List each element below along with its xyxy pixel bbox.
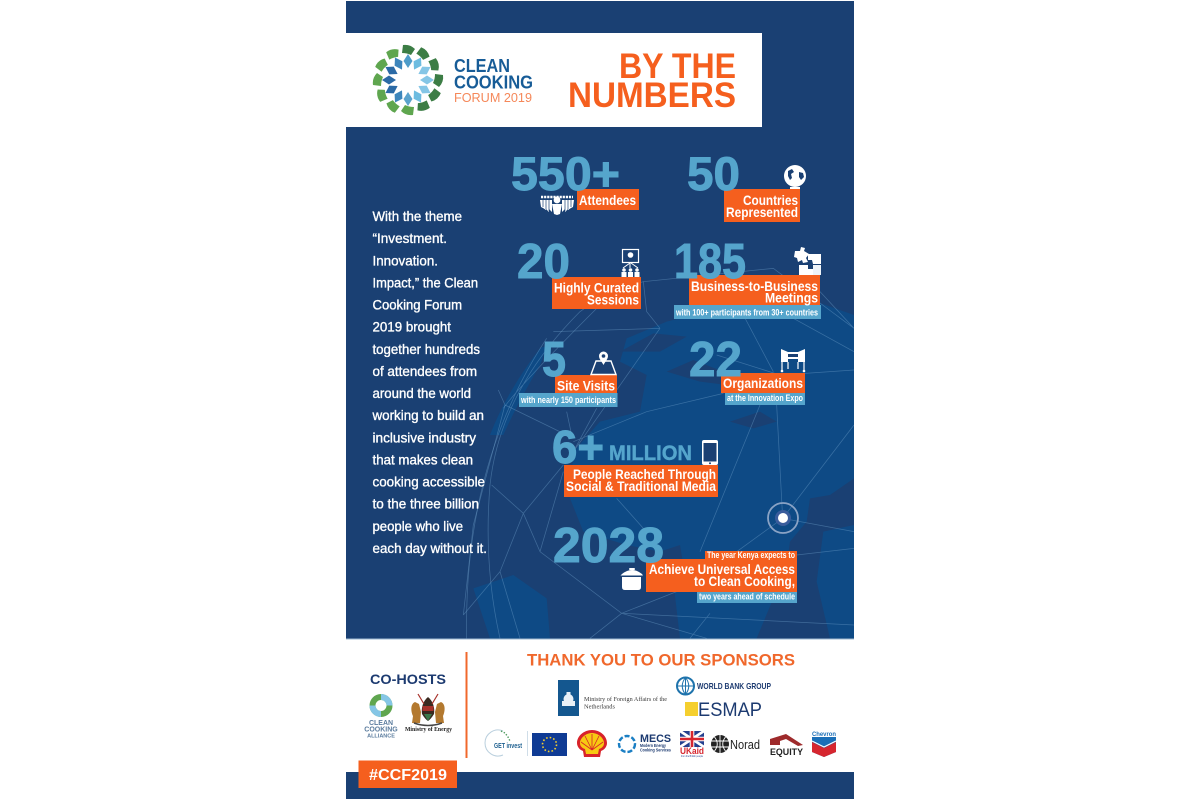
stat: 185 meetings: Business-to-Business [691, 278, 818, 294]
icon: map pin [591, 352, 616, 374]
header band [346, 33, 762, 127]
logo: MECS: Modern Energy [640, 743, 666, 748]
intro text block: inclusive industry [372, 429, 476, 445]
icon: cooking pot [620, 568, 643, 590]
logo: UK aid [680, 731, 704, 758]
logo: Clean Cooking Alliance [364, 697, 398, 740]
title [568, 47, 736, 115]
intro text block: Cooking Forum [372, 296, 462, 312]
panel: navy poster background [346, 1, 854, 799]
logo: Netherlands ministry [558, 680, 667, 716]
stat: 22 organizations: 22 [689, 333, 742, 387]
icon: globe [784, 165, 806, 189]
logo: Clean Cooking Alliance: CLEAN [369, 720, 393, 727]
stat: 20 sessions [517, 235, 641, 309]
icon: expo booth [781, 349, 805, 372]
intro text block: that makes clean [372, 452, 473, 468]
stat: 50 countries: Represented [726, 204, 798, 220]
stat: 2028 universal access: 2028 [553, 519, 664, 573]
globe map background [463, 268, 854, 638]
stat: 185 meetings [674, 235, 821, 319]
logo: Ministry of Energy crest: Ministry of Energy [405, 726, 453, 733]
stat: 20 sessions: Highly Curated [554, 280, 639, 296]
stat: 22 organizations: at the Innovation Expo [727, 393, 803, 404]
logo: Chevron [812, 731, 836, 757]
logo: GET invest: GET invest [494, 743, 523, 750]
logo: Netherlands ministry: Ministry of Foreign Affairs of the [584, 696, 667, 703]
stat: 6+ million: Social & Traditional Media [566, 478, 716, 494]
logo wordmark: CLEAN [454, 56, 510, 76]
stat: 20 sessions: 20 [517, 235, 570, 289]
icon: crowd [540, 197, 574, 215]
stat: 6+ million: 6+ [552, 421, 604, 473]
intro text block: working to build an [372, 407, 484, 423]
stat: 185 meetings: 185 [674, 235, 746, 289]
logo wordmark: FORUM 2019 [454, 90, 532, 105]
logo: EU flag [532, 733, 567, 756]
divider bar [466, 652, 468, 758]
intro text block: With the theme [372, 208, 462, 224]
stat: 185 meetings: Meetings [765, 290, 818, 306]
stat: 2028 universal access: two years ahead of schedule [699, 592, 795, 602]
logo: UK aid: UKaid [680, 746, 704, 756]
logo: MECS: Cooking Services [640, 748, 671, 752]
stat: 185 meetings: with 100+ participants from 30+ countries [675, 308, 818, 318]
intro text block: together hundreds [372, 341, 480, 357]
logo: Clean Cooking Alliance: ALLIANCE [367, 734, 395, 740]
stat: 22 organizations: Organizations [723, 375, 803, 391]
logo: ESMAP: ESMAP [698, 700, 762, 721]
logo: MECS: MECS [640, 733, 671, 745]
title: BY THE [619, 47, 736, 86]
logo: Norad [711, 735, 760, 753]
hashtag badge: #CCF2019 [369, 767, 447, 784]
intro text block: to the three billion [372, 496, 479, 512]
logo: Norad: Norad [730, 738, 760, 752]
stat: 2028 universal access [553, 519, 797, 603]
intro text block: of attendees from [372, 363, 477, 379]
stat: 550+ attendees [511, 147, 639, 215]
stat: 5 site visits: 5 [542, 333, 566, 387]
stat: 2028 universal access: to Clean Cooking, [694, 573, 795, 589]
stat: 2028 universal access: The year Kenya expects to [707, 550, 795, 561]
logo: Equity: EQUITY [770, 747, 804, 758]
intro text block: around the world [372, 385, 471, 401]
title: NUMBERS [568, 76, 736, 115]
logo: World Bank Group [677, 678, 771, 694]
logo: Chevron: Chevron [812, 731, 836, 738]
icon: presentation [622, 250, 640, 277]
intro text block: “Investment. [372, 230, 447, 246]
logo: World Bank Group: WORLD BANK GROUP [697, 681, 771, 691]
heading: co-hosts: CO-HOSTS [370, 671, 446, 687]
stat: 50 countries: 50 [687, 147, 740, 200]
stat: 550+ attendees: 550+ [511, 147, 620, 200]
logo: Shell [577, 730, 607, 757]
logo: Ministry of Energy crest [405, 694, 453, 733]
stat: 5 site visits: Site Visits [557, 378, 615, 394]
logo: UK aid: from the British people [681, 754, 703, 758]
logo: Netherlands ministry: Netherlands [584, 704, 615, 710]
stat: 50 countries: Countries [743, 192, 798, 208]
stat: 6+ million: People Reached Through [573, 466, 716, 482]
stat: 5 site visits: with nearly 150 participants [520, 395, 616, 406]
logo: Clean Cooking Alliance: COOKING [364, 726, 398, 734]
logo: Equity [770, 734, 804, 758]
intro text block: people who live [372, 518, 463, 534]
stat: 550+ attendees: Attendees [579, 192, 636, 208]
logo wordmark [454, 56, 533, 105]
heading: thank you to our sponsors: THANK YOU TO OUR SPONSORS [527, 650, 795, 670]
intro text block: cooking accessible [372, 474, 485, 490]
intro text block: Innovation. [372, 252, 438, 268]
hashtag badge [358, 760, 457, 788]
stat: 6+ million [552, 421, 718, 497]
logo wordmark: COOKING [454, 72, 533, 92]
icon: phone [702, 440, 718, 465]
intro text block [372, 208, 487, 556]
stat: 20 sessions: Sessions [587, 292, 639, 308]
intro text block: Impact,” the Clean [372, 274, 478, 290]
icon: puzzle [794, 247, 821, 275]
panel: footer sponsors [346, 638, 854, 772]
stat: 22 organizations [689, 333, 805, 405]
logo: MECS [619, 733, 671, 752]
stat: 5 site visits [519, 333, 618, 407]
stat: 6+ million: MILLION [609, 442, 692, 465]
logo: GET invest [485, 730, 528, 756]
stat: 2028 universal access: Achieve Universal Access [649, 561, 795, 577]
marker: Kenya location [768, 503, 798, 533]
stat: 50 countries [687, 147, 806, 222]
icon: forum logo [373, 45, 443, 115]
intro text block: 2019 brought [372, 319, 451, 335]
intro text block: each day without it. [372, 540, 487, 556]
